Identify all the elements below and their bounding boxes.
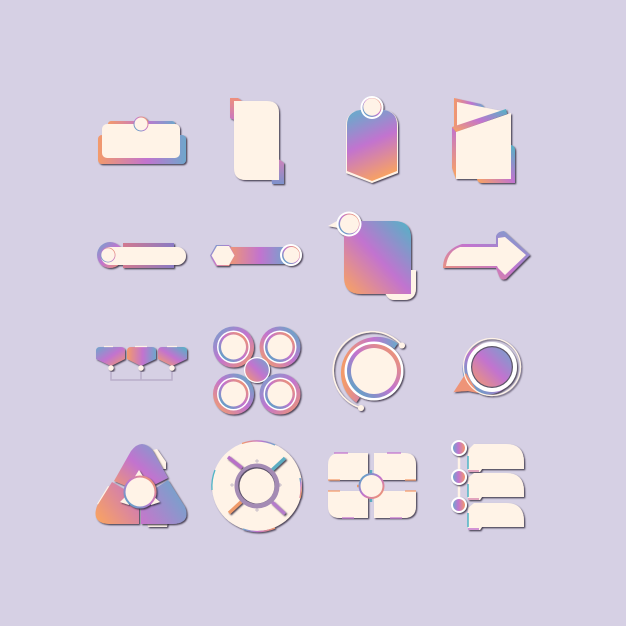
element: three connected shields [96,346,187,380]
right segment [141,480,186,524]
element: rounded triangle segments [96,444,186,527]
element: gradient bar with hexagon and circle [210,244,302,266]
element: four quadrant cards with hub [328,453,416,518]
top segment [114,444,168,492]
element: lifebuoy ring [212,441,302,531]
accent strokes [328,453,416,518]
hub [358,473,384,499]
left segment [96,482,139,524]
element: folded page [452,98,515,183]
element: pill bar with left circle [97,242,186,268]
element: rounded banner with top circle [98,116,186,164]
element: arrow [443,231,530,280]
element: round speech bubble [453,338,520,396]
back tabs [97,449,168,527]
connector [458,448,460,506]
element: circle with orbit arcs [333,332,405,411]
dots [108,365,175,371]
node dots [451,440,467,513]
element: speech blob with circle [328,212,416,300]
connector lines [111,368,172,380]
center hub [120,470,160,508]
element: tall card with corner tabs [230,98,284,184]
element: four-circle clover [213,326,300,414]
accent strokes [468,456,479,529]
element: three-step list [451,440,524,530]
element: hexagonal tag [346,96,398,183]
shields [96,347,187,366]
